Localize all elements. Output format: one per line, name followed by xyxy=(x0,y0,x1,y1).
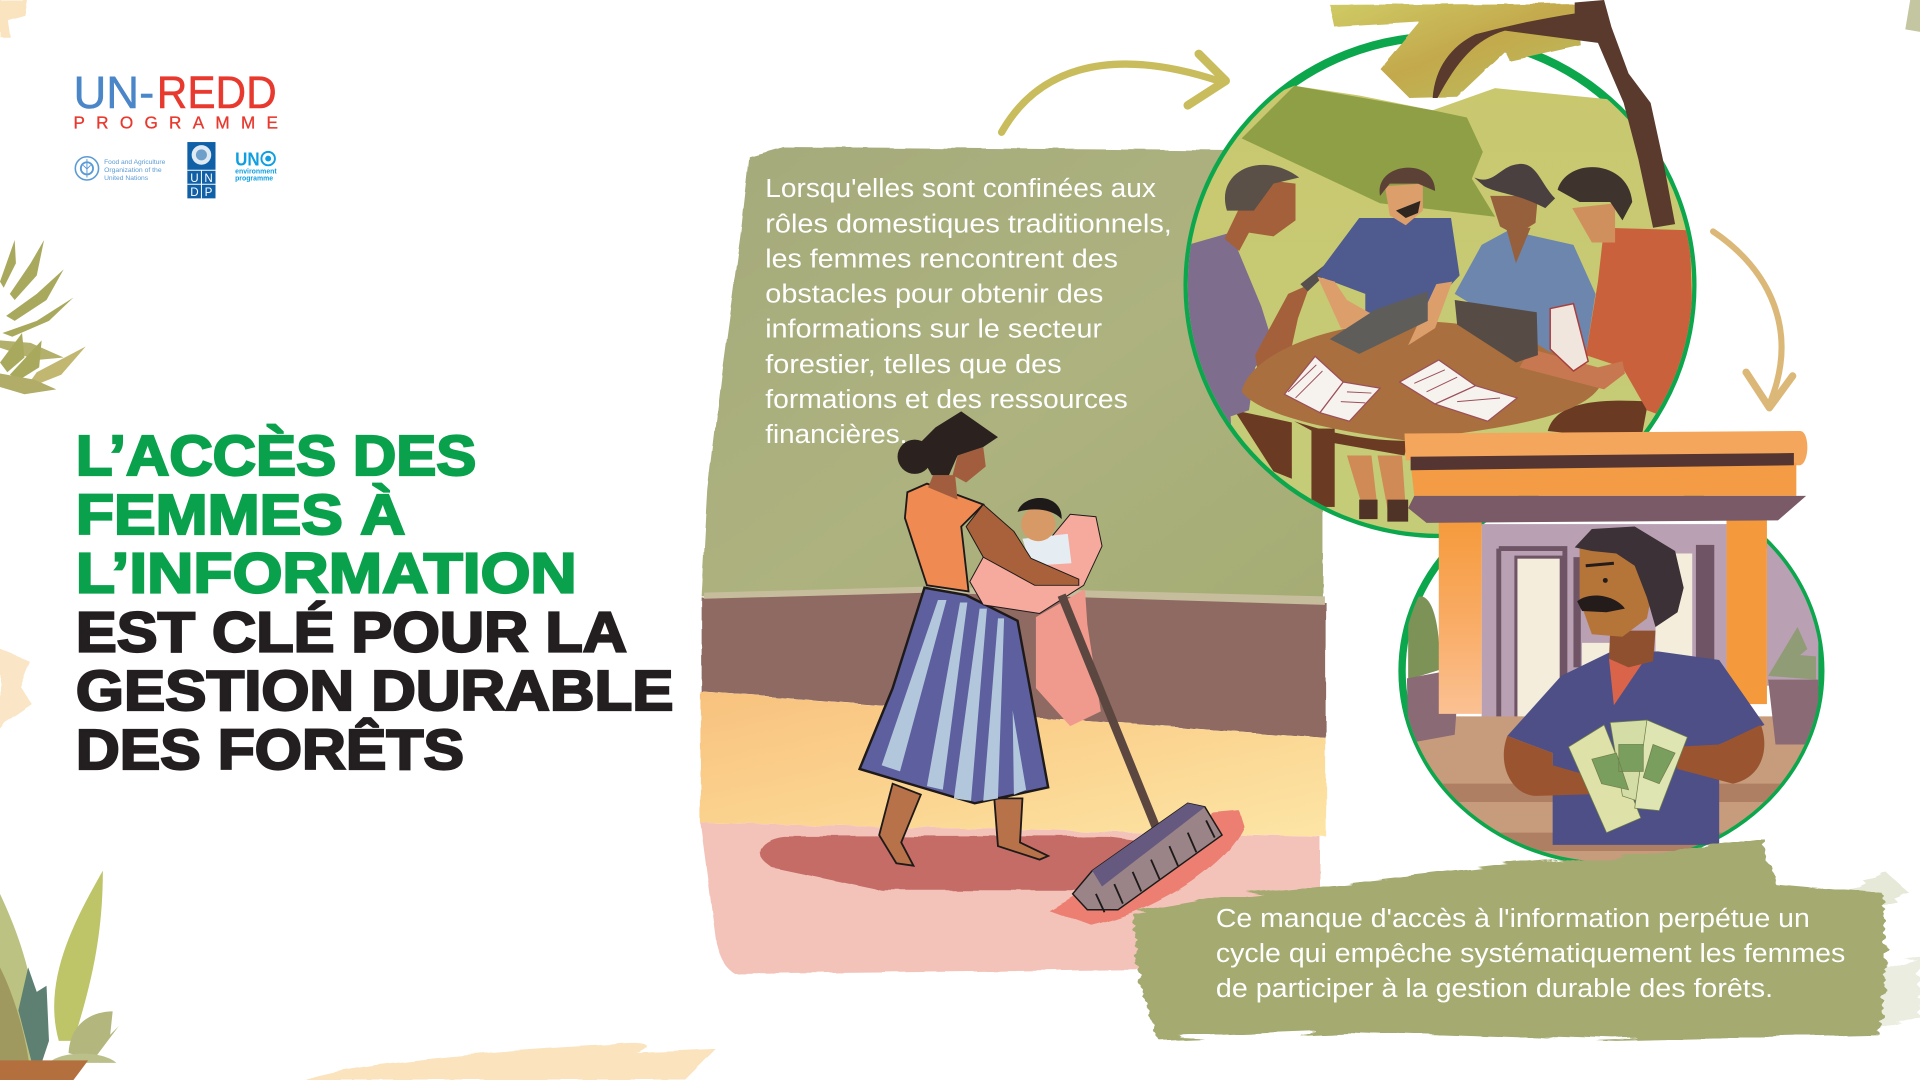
illustration clipped inside circle xyxy=(1176,86,1696,539)
floor shadow xyxy=(760,811,1244,926)
title: FEMMES À xyxy=(76,483,405,546)
decoration: top-left peach wash xyxy=(0,0,27,37)
laptops and tablet xyxy=(1330,291,1588,371)
logo: UN environment: programme xyxy=(235,174,273,183)
baby xyxy=(1018,498,1071,566)
baby sling xyxy=(970,514,1102,613)
text block: domestic roles: Lorsqu'elles sont confinées aux xyxy=(765,175,1156,203)
text block: cycle conclusion xyxy=(1216,905,1845,1003)
decoration: left peach wash xyxy=(0,649,32,729)
banknotes xyxy=(1569,720,1687,833)
title: GESTION DURABLE xyxy=(76,659,673,722)
potted plants xyxy=(1407,596,1818,744)
title: L’INFORMATION xyxy=(76,542,577,605)
logo wordmark: PROGRAMME xyxy=(73,113,278,133)
text block: domestic roles: rôles domestiques traditionnels, xyxy=(765,210,1172,238)
panel: woman sweeping scene xyxy=(700,147,1326,973)
text block: domestic roles: forestier, telles que des xyxy=(765,351,1062,379)
title: EST CLÉ POUR LA xyxy=(76,600,627,663)
orange blouse xyxy=(905,484,983,591)
logo: FAO: United Nations xyxy=(104,175,149,182)
striped skirt xyxy=(860,588,1048,803)
text block: domestic roles: les femmes rencontrent des xyxy=(765,245,1118,273)
decoration: top-right leaf fragment xyxy=(1905,0,1920,32)
title: DES FORÊTS xyxy=(76,718,464,781)
hanging sling xyxy=(1036,589,1101,726)
logo: FAO xyxy=(75,157,165,182)
logo: UNDP: N xyxy=(204,172,213,185)
house pillars xyxy=(1439,520,1767,714)
logo wordmark: REDD xyxy=(157,67,277,118)
logo wordmark: UN- xyxy=(73,67,154,118)
text block: domestic roles: informations sur le secteur xyxy=(765,316,1103,344)
head and hair xyxy=(898,411,998,500)
panel: man with money circle xyxy=(1402,431,1824,869)
logo: UN environment: UN xyxy=(235,148,260,169)
tree with leaves and trunk xyxy=(1330,0,1675,228)
logo: UNDP xyxy=(187,142,216,199)
man: right, orange shirt xyxy=(1520,167,1696,429)
decoration: right faint brush strokes xyxy=(1812,872,1920,1029)
text block: cycle conclusion: cycle qui empêche systématiquement les femmes xyxy=(1216,940,1845,968)
logo: UNDP: U xyxy=(190,172,199,185)
text block: cycle conclusion: de participer à la gestion durable des forêts. xyxy=(1216,975,1773,1003)
house lintel xyxy=(1404,431,1807,523)
lower figures and table legs xyxy=(1234,401,1648,522)
text block: domestic roles: formations et des ressources xyxy=(765,386,1128,414)
table xyxy=(1242,321,1600,441)
legs xyxy=(879,784,1048,866)
open books xyxy=(1284,356,1517,421)
panel background bands xyxy=(700,147,1326,973)
text block: domestic roles: financières. xyxy=(765,421,907,449)
arm xyxy=(966,504,1079,585)
panel: bottom green text block background xyxy=(1133,838,1886,1041)
title xyxy=(76,424,673,781)
woman figure xyxy=(860,411,1222,912)
logo: UNDP: P xyxy=(205,186,213,199)
text block: domestic roles: obstacles pour obtenir des xyxy=(765,281,1103,309)
arrow: tan arrow to house circle xyxy=(1713,231,1793,408)
man: left, purple shirt xyxy=(1188,164,1324,424)
man: second, navy shirt xyxy=(1316,168,1460,345)
man with moustache xyxy=(1504,527,1764,845)
decoration: left palm leaves xyxy=(0,240,86,394)
logo: UN environment xyxy=(235,148,277,183)
logo: UN environment: environment xyxy=(235,166,277,175)
decoration: bottom-left potted plant xyxy=(0,871,119,1080)
logo wordmark xyxy=(73,67,278,133)
logo: UNDP: D xyxy=(190,186,199,199)
panel: men group circle xyxy=(1176,0,1696,539)
scene clipped inside circle xyxy=(1402,524,1824,869)
broom bristles xyxy=(1096,820,1215,912)
arrow: olive arrow to men circle xyxy=(1002,54,1226,132)
logo: UN-REDD Programme and partners xyxy=(73,67,278,199)
broom xyxy=(1062,595,1222,912)
title: L’ACCÈS DES xyxy=(76,424,476,487)
decoration: bottom peach brush strokes xyxy=(304,1043,716,1080)
text block: domestic roles xyxy=(765,175,1172,449)
logo: FAO: Organization of the xyxy=(104,167,162,174)
text block: cycle conclusion: Ce manque d'accès à l'information perpétue un xyxy=(1216,905,1810,933)
beige stripe xyxy=(704,587,1325,605)
man: third, blue shirt with hat xyxy=(1455,164,1596,355)
logo: FAO: Food and Agriculture xyxy=(104,159,165,166)
